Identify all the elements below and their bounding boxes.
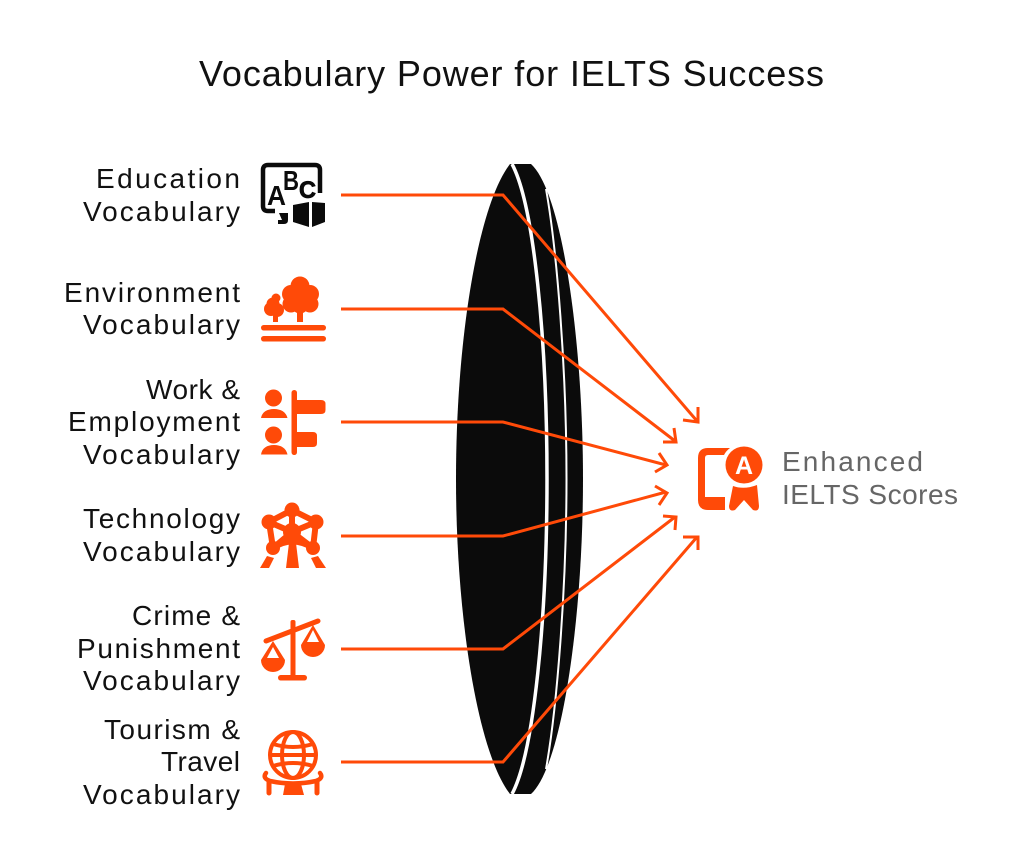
label: education [83, 163, 240, 227]
icon: certificate badge [698, 446, 762, 510]
icon: ABC book: A [267, 180, 286, 211]
icon: ABC book: C [299, 177, 316, 204]
label: technology [83, 503, 240, 567]
label: work and employment [68, 374, 240, 470]
label: environment: Vocabulary [83, 309, 240, 340]
label: education: Education [96, 163, 240, 194]
label: enhanced IELTS scores: Enhanced [782, 446, 923, 477]
label: environment: Environment [64, 277, 240, 308]
label: tourism and travel [83, 714, 240, 810]
label: crime and punishment: Punishment [77, 633, 240, 664]
title: Vocabulary Power for IELTS Success [199, 53, 824, 94]
lens shape [456, 164, 583, 794]
label: tourism and travel: Tourism & [104, 714, 240, 745]
label: technology: Technology [83, 503, 240, 534]
label: technology: Vocabulary [83, 536, 240, 567]
label: environment [64, 277, 240, 340]
icon: certificate badge: A [735, 452, 753, 480]
label: crime and punishment [77, 600, 240, 696]
label: education: Vocabulary [83, 196, 240, 227]
label: tourism and travel: Travel [161, 746, 240, 777]
icon: ABC book: B [283, 165, 299, 196]
label: work and employment: Work & [146, 374, 240, 405]
label: tourism and travel: Vocabulary [83, 779, 240, 810]
icon: atomium [260, 502, 326, 568]
label: crime and punishment: Crime & [132, 600, 240, 631]
icon: ABC book [263, 165, 325, 227]
icon: globe [265, 732, 321, 795]
label: crime and punishment: Vocabulary [83, 665, 240, 696]
connectors and arrows [341, 195, 698, 762]
label: enhanced IELTS scores [782, 446, 958, 510]
icon: trees [261, 276, 326, 342]
icon: scales [261, 620, 325, 680]
label: work and employment: Vocabulary [83, 439, 240, 470]
label: enhanced IELTS scores: IELTS Scores [782, 479, 958, 510]
icon: people and signpost [261, 390, 326, 455]
label: work and employment: Employment [68, 406, 240, 437]
